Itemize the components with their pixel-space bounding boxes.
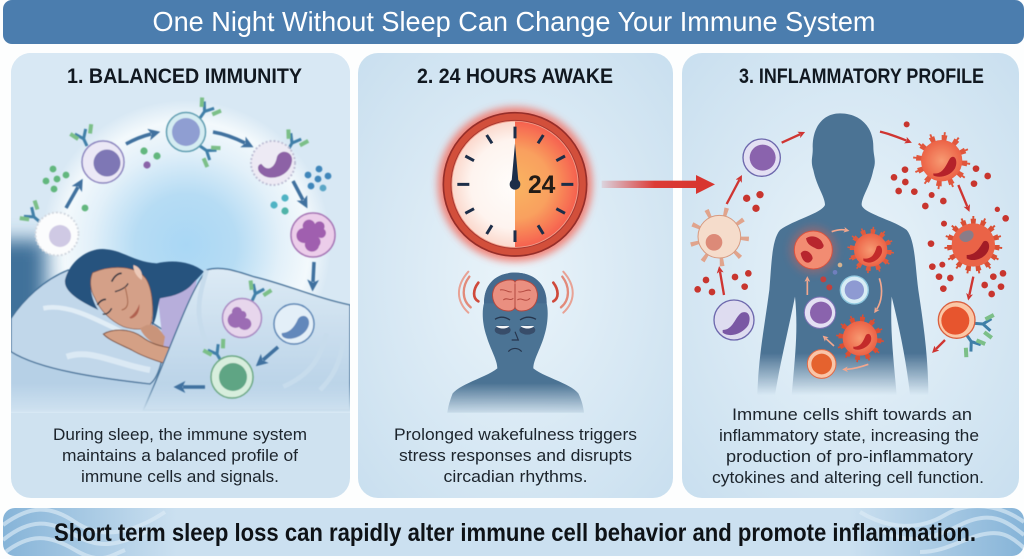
panel: inflammatory profile <box>602 53 1019 498</box>
immune cell cycle <box>20 98 335 398</box>
red cytokine dots <box>694 121 1009 297</box>
body text: production of pro-inflammatory <box>726 447 974 466</box>
title: One Night Without Sleep Can Change Your Immune System <box>152 6 876 37</box>
body text <box>712 405 984 487</box>
arrows <box>66 132 314 387</box>
body text <box>53 425 307 486</box>
sleep illustration background <box>0 53 350 413</box>
heading: 3. INFLAMMATORY PROFILE <box>739 65 984 88</box>
body text: Immune cells shift towards an <box>732 405 972 424</box>
inner cells <box>790 227 891 378</box>
body text: inflammatory state, increasing the <box>719 426 979 445</box>
footer banner <box>3 506 1024 558</box>
body text: cytokines and altering cell function. <box>712 468 984 487</box>
body text: stress responses and disrupts <box>399 446 632 465</box>
cell: pink lobed <box>291 213 335 257</box>
left cells <box>694 139 780 340</box>
inner arrows <box>807 230 882 369</box>
stress waves <box>459 272 573 313</box>
heading: 2. 24 HOURS AWAKE <box>417 65 613 88</box>
body silhouette <box>757 113 928 395</box>
antibodies <box>20 200 48 230</box>
cell: teal <box>166 112 206 152</box>
cell: white <box>36 212 78 256</box>
timeline arrow from clock <box>602 175 715 194</box>
red arrows <box>720 132 973 349</box>
panel: 24 hours awake <box>358 53 673 498</box>
body text: immune cells and signals. <box>81 467 279 486</box>
sleeping woman <box>0 249 367 412</box>
heading: 1. BALANCED IMMUNITY <box>67 65 302 88</box>
cell: kidney <box>251 141 295 185</box>
sleep-deprived head <box>447 273 584 413</box>
body text: Prolonged wakefulness triggers <box>394 425 637 444</box>
cell: lavender <box>82 141 124 183</box>
right cells <box>916 135 999 357</box>
body text <box>394 425 637 486</box>
cell: green <box>211 356 253 398</box>
body text: maintains a balanced profile of <box>62 446 298 465</box>
header banner <box>3 0 1024 44</box>
clock <box>438 107 592 262</box>
body text: circadian rhythms. <box>444 467 588 486</box>
clock label: 24 <box>528 172 556 199</box>
cell: bubble <box>274 304 314 344</box>
signal dots <box>43 147 331 215</box>
body text: During sleep, the immune system <box>53 425 307 444</box>
panel: balanced immunity <box>0 53 367 498</box>
cell: pink small <box>222 298 262 338</box>
